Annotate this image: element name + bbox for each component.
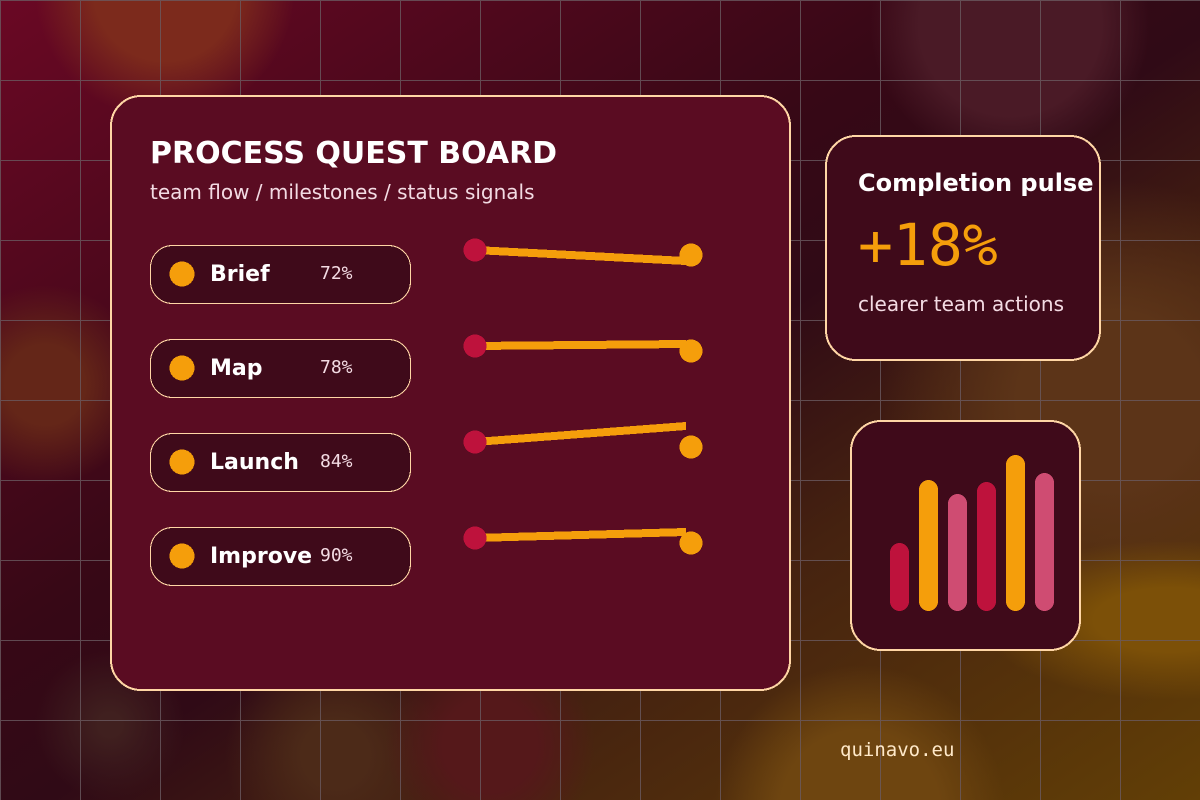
row: Launch: Launch <box>210 450 299 475</box>
subtitle: team flow / milestones / status signals <box>150 180 535 204</box>
card heading: Completion pulse <box>858 169 1093 197</box>
panel: bar chart <box>851 421 1080 650</box>
row: Improve <box>150 528 410 586</box>
connector: Brief <box>464 238 702 266</box>
title: PROCESS QUEST BOARD <box>150 136 557 171</box>
row: Map <box>150 340 410 398</box>
bar 3 <box>948 494 967 611</box>
panel: completion pulse <box>826 136 1100 360</box>
connector: Improve <box>464 526 702 554</box>
connector: Map <box>464 334 702 362</box>
row: Improve: Improve <box>210 544 312 569</box>
bar 2 <box>919 480 938 611</box>
row: Improve: 90% <box>320 545 353 566</box>
row: Map: Map <box>210 356 262 381</box>
panel: process quest board <box>111 96 790 690</box>
connector: Launch <box>464 422 702 458</box>
stat value: +18% <box>858 211 998 279</box>
row: Brief <box>150 246 410 304</box>
row: Launch <box>150 434 410 492</box>
bar 4 <box>977 482 996 611</box>
row: Launch: 84% <box>320 451 353 472</box>
row: Brief: 72% <box>320 263 353 284</box>
row: Brief: Brief <box>210 262 270 287</box>
bar 1 <box>890 543 909 611</box>
footer brand: quinavo.eu <box>840 739 954 761</box>
bar 6 <box>1035 473 1054 611</box>
row: Map: 78% <box>320 357 353 378</box>
bar 5 <box>1006 455 1025 611</box>
stat caption: clearer team actions <box>858 292 1064 316</box>
